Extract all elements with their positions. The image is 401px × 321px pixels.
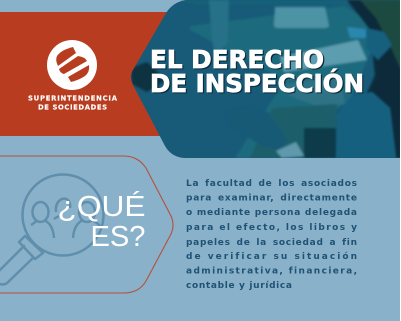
heading: ¿qué es?: ES? (90, 221, 146, 253)
icon: magnifier with people (0, 174, 104, 284)
heading: ¿qué es?: ¿QUÉ (58, 190, 146, 223)
desk surface (190, 6, 380, 158)
photo panel: desk with keyboard (125, 0, 401, 158)
logo name: SUPERINTENDENCIA (28, 94, 118, 102)
text block: definition: contable y jurídica (186, 281, 292, 291)
person middle (54, 199, 70, 219)
title text (150, 45, 364, 98)
cuff (276, 142, 304, 158)
lens (22, 174, 104, 256)
text block: definition: administrativa, financiera, (186, 266, 357, 276)
logo name: DE SOCIEDADES (38, 104, 107, 112)
keyboard (280, 40, 367, 72)
panel: ¿qué es? outline (0, 156, 173, 293)
title text: EL DERECHO (150, 45, 324, 74)
title (150, 45, 365, 99)
text block: definition: para examinar, directamente (186, 194, 357, 204)
title shadow (151, 46, 365, 99)
wood lower (250, 104, 337, 158)
dark gap (304, 128, 336, 158)
title text: DE INSPECCIÓN (150, 68, 364, 98)
text block: definition: de verificar su situación (186, 251, 357, 262)
logo: Superintendencia de Sociedades (28, 40, 118, 112)
page edge (400, 0, 401, 321)
heading: ¿qué es? (58, 190, 146, 253)
dark notebook (131, 62, 166, 92)
monitor stand (274, 7, 329, 28)
glass (209, 0, 229, 50)
text block: definition: o mediante persona delegada (186, 208, 357, 218)
cushion (286, 78, 346, 106)
text block: definition: para el efecto, los libros y (186, 223, 357, 233)
icon: logo circle (47, 40, 97, 90)
logo name (28, 94, 118, 112)
text block: definition (186, 179, 357, 291)
monitor (179, 0, 349, 4)
hand (249, 112, 286, 148)
handle (19, 236, 43, 259)
text block: definition: La facultad de los asociados (186, 179, 357, 189)
banner: red band (0, 12, 175, 136)
dark person (347, 0, 400, 158)
title shadow: DE INSPECCIÓN (151, 69, 365, 99)
small object (347, 27, 368, 38)
title shadow: EL DERECHO (151, 46, 325, 75)
person left (31, 202, 54, 238)
text block: definition: papeles de la sociedad a fin (186, 238, 357, 248)
shirt (336, 92, 396, 158)
person right (73, 202, 101, 238)
